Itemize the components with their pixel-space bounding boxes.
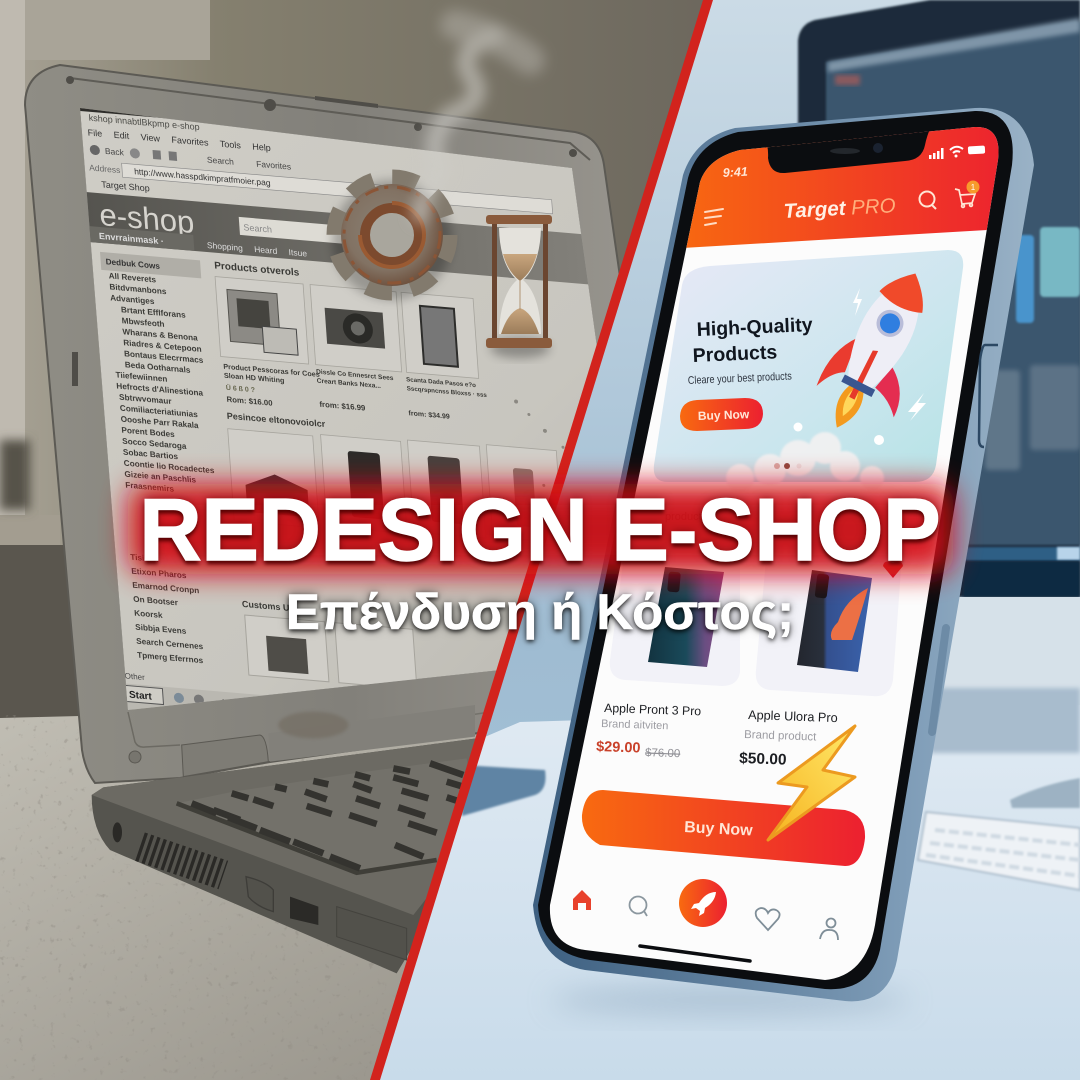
hero heading	[692, 314, 813, 367]
windows taskbar: (6€€:)	[221, 698, 245, 709]
app header	[686, 127, 998, 248]
laptop screen bezel	[25, 65, 672, 783]
site header: e-shop	[98, 197, 195, 240]
carousel dots	[774, 463, 802, 469]
panel: modern phone scene	[360, 0, 1080, 1080]
product 2 details	[739, 708, 838, 769]
back wall under monitor	[944, 597, 1080, 705]
sidebar: Sibbja Evens	[135, 623, 187, 636]
sparkle bolts	[794, 288, 926, 445]
monitor stand	[930, 688, 1080, 753]
product 2 details: $50.00	[739, 750, 787, 769]
hero banner card	[654, 250, 963, 482]
sidebar: Bitdvmanbons	[109, 282, 167, 296]
windows taskbar	[125, 673, 263, 710]
sidebar: Etixon Pharos	[131, 567, 187, 580]
home indicator	[640, 946, 750, 961]
sidebar: Sbtrwvomaur	[119, 393, 173, 406]
background monitor	[798, 0, 1080, 597]
tab: Target Shop	[101, 179, 150, 193]
old browser screen	[80, 108, 596, 710]
sidebar: Sobac Bartios	[123, 448, 179, 461]
keyboard	[918, 812, 1080, 890]
sidebar: Wharans & Benona	[122, 327, 198, 343]
product grid row 1: Creart Banks Nexa...	[317, 378, 381, 390]
title bar text: kshop innabtlBkpmp e-shop	[88, 113, 200, 132]
address bar	[89, 160, 553, 214]
product 2 details: Brand product	[744, 729, 817, 744]
sidebar: Tpmerg Eferrnos	[137, 651, 204, 665]
browser toolbar: Search Favorites	[207, 155, 291, 172]
site header: Search	[243, 222, 272, 235]
phone screen	[550, 127, 999, 980]
section heading: Pesincoe eltonovoiolcr	[226, 411, 326, 429]
sidebar: Fraasnemirs	[125, 481, 175, 494]
sidebar: Coontie lio Rocadectes	[123, 459, 215, 475]
product grid row 1: Rom: $16.00	[226, 395, 273, 408]
sidebar: Koorsk	[134, 609, 163, 620]
rusty gear icon	[332, 179, 452, 300]
product grid row 1: from: $34.99	[408, 410, 450, 421]
diagonal red divider	[370, 0, 713, 1080]
windows taskbar: Start	[129, 690, 153, 703]
sidebar: Porent Bodes	[121, 426, 175, 439]
sidebar: Socco Sedaroga	[122, 437, 187, 451]
sidebar: Brtant Efflforans	[121, 305, 186, 320]
lightning bolt icon	[768, 726, 855, 840]
product 1 details: $29.00	[596, 739, 641, 757]
site header: Envrrainmask ·	[99, 231, 164, 246]
site header: Shopping Heard Itsue	[207, 240, 308, 259]
panel: old laptop scene	[0, 0, 745, 1080]
address bar: Address	[89, 162, 121, 175]
webcam and screws	[66, 76, 577, 763]
cart badge: 1	[971, 183, 976, 192]
hero heading: High-Quality	[696, 314, 813, 341]
product 1 details: Brand aitviten	[601, 718, 669, 732]
address bar: http://www.hasspdkimpratfmoier.pag	[134, 166, 271, 188]
app logo: Target PRO	[783, 194, 896, 223]
product 1 details: $76.00	[645, 747, 680, 760]
buy now button: Buy Now	[684, 819, 754, 840]
blurred mouse	[462, 765, 546, 816]
subtitle: Επένδυση ή Κόστος;	[286, 584, 794, 640]
sidebar: Advantiges	[110, 293, 155, 306]
product grid row 1: from: $16.99	[319, 400, 366, 413]
sidebar: Hefrocts d'Alinestiona	[116, 381, 204, 398]
hero subtitle: Cleare your best products	[688, 370, 792, 387]
hinge dust	[278, 712, 348, 738]
product 2 details: Apple Ulora Pro	[748, 708, 838, 725]
menu bar: File Edit View Favorites Tools Help	[87, 128, 271, 153]
products heading: Products otverols	[214, 261, 300, 279]
product grid row 1: Dissle Co Ennesrct Sees	[316, 369, 394, 382]
desk	[360, 705, 1080, 1080]
red title glow	[128, 484, 953, 574]
sidebar: Emarnod Cronpn	[132, 581, 200, 595]
hamburger menu icon	[705, 209, 723, 225]
product 1 details: Apple Pront 3 Pro	[604, 701, 702, 718]
product 1 details	[596, 701, 702, 760]
windows taskbar: Other	[124, 671, 145, 682]
product grid row 1: Scanta Dada Pasos e?o	[406, 376, 476, 389]
product grid row 1: Product Pesscoras for Coes	[223, 362, 320, 379]
hero heading: Products	[692, 341, 778, 367]
browser toolbar: Back	[105, 146, 125, 158]
sidebar: Tiiefewiinnen	[115, 370, 168, 384]
product grid row 1: Ü 6 ß 0 ?	[225, 383, 255, 394]
product grid row 1: Sscqrspncnss Bloxss · sss	[407, 385, 488, 399]
smoke	[420, 25, 530, 215]
search icon	[920, 192, 936, 209]
main title: REDESIGN E-SHOP	[140, 480, 940, 579]
sidebar: Gizeie an Paschlis	[124, 470, 197, 485]
product grid row 1: Sloan HD Whiting	[224, 371, 285, 385]
sidebar: Bontaus Elecrrmacs	[124, 349, 204, 365]
buy now button	[582, 790, 865, 866]
status time: 9:41	[722, 165, 748, 180]
product grid row 2	[227, 428, 558, 518]
status icons	[929, 146, 985, 159]
sidebar: Dedbuk Cows	[105, 257, 161, 271]
site header	[86, 192, 588, 284]
sidebar: Riadres & Cetepoon	[123, 338, 202, 354]
monitor foot	[1010, 778, 1080, 808]
sidebar	[100, 252, 214, 664]
hero button: Buy Now	[698, 407, 750, 423]
sidebar: Oooshe Parr Rakala	[120, 415, 199, 430]
sidebar: Comiliacteriatiunias	[120, 404, 199, 419]
browser toolbar	[90, 145, 291, 172]
product card 2	[756, 515, 905, 696]
product card 1: product	[665, 511, 702, 523]
hero clouds	[726, 432, 884, 492]
sidebar: Beda Ootharnals	[125, 360, 191, 375]
hourglass icon	[486, 215, 552, 358]
sidebar: Search Cernenes	[136, 637, 204, 651]
lower section: Customs Us	[242, 599, 295, 613]
product grid row 1	[215, 277, 490, 426]
bottom nav icons	[573, 879, 838, 940]
dirt specks	[514, 400, 564, 487]
sidebar: On Bootser	[133, 595, 179, 607]
sidebar: Tisikan	[130, 553, 159, 564]
cart badge	[966, 180, 980, 194]
cart icon	[955, 189, 975, 207]
product card 1	[610, 510, 740, 686]
laptop base and keyboard	[92, 705, 493, 973]
rocket illustration	[803, 256, 956, 449]
smartphone	[530, 95, 1034, 1014]
sidebar: All Reverets	[108, 271, 157, 285]
hero button	[680, 398, 763, 431]
sidebar: Mbwsfeoth	[121, 316, 165, 329]
lower section	[242, 599, 417, 689]
